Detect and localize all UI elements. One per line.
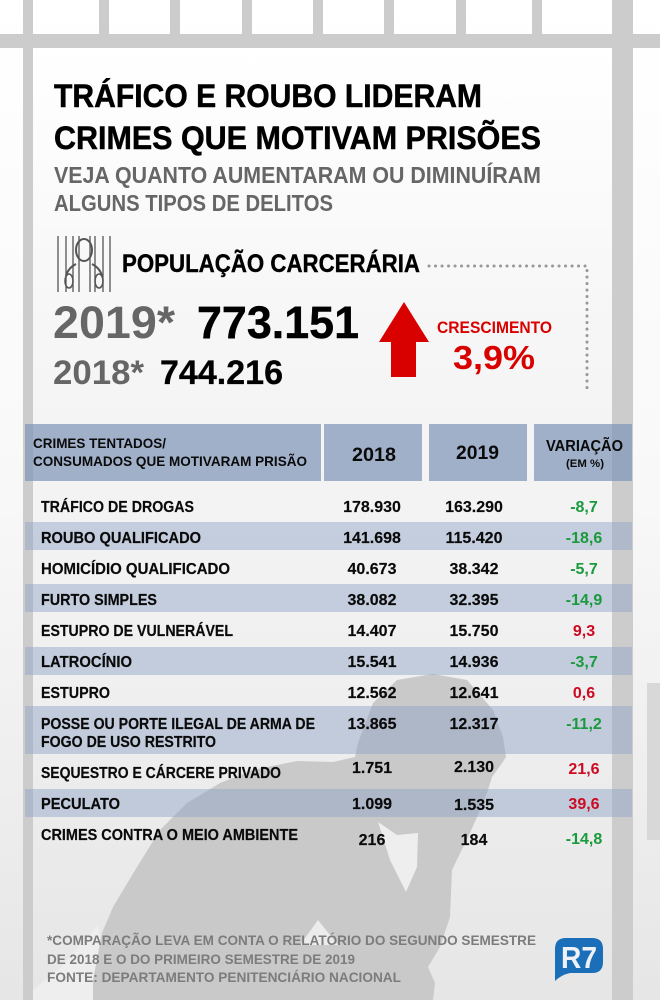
row: peculato: 39,6 — [568, 796, 600, 813]
logo: R7: R7 — [561, 940, 597, 975]
row: sequestro e cárcere privado: 1.751 — [352, 760, 392, 777]
dotted connector — [429, 266, 587, 390]
row: latrocínio — [41, 652, 598, 671]
table header: CRIMES TENTADOS/ — [33, 435, 166, 451]
figure 2018: 2018* — [53, 354, 145, 392]
row: peculato: PECULATO — [41, 796, 120, 813]
row: furto simples: -14,9 — [566, 592, 602, 609]
row: roubo qualificado: -18,6 — [566, 530, 602, 547]
row: furto simples — [41, 592, 602, 609]
row: sequestro e cárcere privado: SEQUESTRO E CÁRCERE PRIVADO — [41, 763, 281, 782]
row: posse ou porte ilegal: POSSE OU PORTE ILEGAL DE ARMA DE — [41, 716, 315, 733]
heading: população carcerária: POPULAÇÃO CARCERÁRIA — [122, 248, 420, 278]
row: estupro: 0,6 — [573, 685, 595, 702]
icon: prisoner behind bars — [58, 236, 110, 292]
row: crimes contra o meio ambiente: 216 — [359, 832, 385, 849]
footnote and source: FONTE: DEPARTAMENTO PENITENCIÁRIO NACIONAL — [47, 969, 401, 985]
row: tráfico de drogas — [41, 497, 598, 516]
table header: 2018 — [352, 445, 396, 466]
figure 2018: 744.216 — [160, 354, 283, 392]
row: sequestro e cárcere privado: 21,6 — [568, 761, 600, 778]
subtitle: ALGUNS TIPOS DE DELITOS — [54, 190, 333, 216]
row: posse ou porte ilegal: 13.865 — [348, 716, 397, 733]
figure 2018 — [53, 354, 283, 392]
row: crimes contra o meio ambiente — [41, 827, 602, 849]
figure 2019: 773.151 — [197, 297, 359, 348]
row: peculato — [41, 796, 600, 814]
row: furto simples: FURTO SIMPLES — [41, 592, 157, 609]
row: estupro de vulnerável: 15.750 — [450, 623, 499, 640]
row: peculato: 1.535 — [454, 797, 494, 814]
row: homicídio qualificado: 38.342 — [450, 561, 499, 578]
row: sequestro e cárcere privado: 2.130 — [454, 759, 494, 776]
growth callout: CRESCIMENTO — [437, 318, 552, 337]
row: crimes contra o meio ambiente: 184 — [461, 832, 487, 849]
row: estupro — [41, 685, 595, 702]
row: estupro: 12.562 — [348, 685, 397, 702]
growth callout — [437, 318, 552, 376]
row: roubo qualificado: ROUBO QUALIFICADO — [41, 530, 201, 547]
title: CRIMES QUE MOTIVAM PRISÕES — [54, 120, 541, 156]
row: roubo qualificado: 141.698 — [343, 530, 401, 547]
title — [54, 78, 541, 156]
subtitle — [54, 161, 541, 216]
footnote and source: *COMPARAÇÃO LEVA EM CONTA O RELATÓRIO DO SEGUNDO SEMESTRE — [47, 931, 536, 948]
row: tráfico de drogas: -8,7 — [570, 499, 598, 516]
title: TRÁFICO E ROUBO LIDERAM — [54, 78, 482, 114]
row: posse ou porte ilegal: FOGO DE USO RESTRITO — [41, 734, 216, 751]
row: furto simples: 32.395 — [450, 592, 499, 609]
row: homicídio qualificado: 40.673 — [348, 561, 397, 578]
row: peculato: 1.099 — [352, 796, 392, 813]
row: furto simples: 38.082 — [348, 592, 397, 609]
table header: 2019 — [456, 443, 499, 464]
row: roubo qualificado — [41, 530, 602, 547]
row: homicídio qualificado: -5,7 — [570, 561, 598, 578]
table header: VARIAÇÃO — [546, 435, 623, 455]
row: estupro: 12.641 — [450, 685, 499, 702]
row: tráfico de drogas: TRÁFICO DE DROGAS — [41, 497, 194, 516]
row: homicídio qualificado: HOMICÍDIO QUALIFICADO — [41, 559, 230, 578]
row: latrocínio: -3,7 — [570, 654, 598, 671]
arrow: growth — [379, 302, 429, 377]
silhouette of seated prisoner — [33, 674, 506, 1000]
figure 2019: 2019* — [53, 297, 176, 348]
row: crimes contra o meio ambiente: -14,8 — [566, 831, 602, 848]
figure 2019 — [53, 297, 359, 348]
table header: CONSUMADOS QUE MOTIVARAM PRISÃO — [33, 452, 307, 469]
row: posse ou porte ilegal: -11,2 — [566, 716, 602, 733]
row: estupro de vulnerável — [41, 621, 595, 640]
row: latrocínio: LATROCÍNIO — [41, 652, 132, 671]
row: roubo qualificado: 115.420 — [446, 530, 503, 547]
table header: (EM %) — [566, 458, 604, 470]
subtitle: VEJA QUANTO AUMENTARAM OU DIMINUÍRAM — [54, 161, 541, 188]
footnote and source: DE 2018 E O DO PRIMEIRO SEMESTRE DE 2019 — [47, 951, 355, 967]
row: estupro de vulnerável: 9,3 — [573, 623, 595, 640]
table header — [25, 424, 632, 481]
row: tráfico de drogas: 163.290 — [445, 499, 503, 516]
row: crimes contra o meio ambiente: CRIMES CONTRA O MEIO AMBIENTE — [41, 827, 298, 844]
alternating row bands — [25, 522, 632, 817]
row: posse ou porte ilegal — [41, 716, 602, 751]
row: estupro: ESTUPRO — [41, 685, 110, 702]
growth callout: 3,9% — [453, 339, 535, 376]
row: latrocínio: 14.936 — [450, 654, 499, 671]
row: homicídio qualificado — [41, 559, 598, 578]
logo: R7 — [555, 938, 603, 981]
row: tráfico de drogas: 178.930 — [343, 499, 401, 516]
row: posse ou porte ilegal: 12.317 — [450, 716, 499, 733]
footnote and source — [47, 931, 536, 985]
row: estupro de vulnerável: 14.407 — [348, 623, 397, 640]
row: latrocínio: 15.541 — [348, 654, 397, 671]
row: sequestro e cárcere privado — [41, 759, 600, 782]
row: estupro de vulnerável: ESTUPRO DE VULNERÁVEL — [41, 621, 233, 640]
